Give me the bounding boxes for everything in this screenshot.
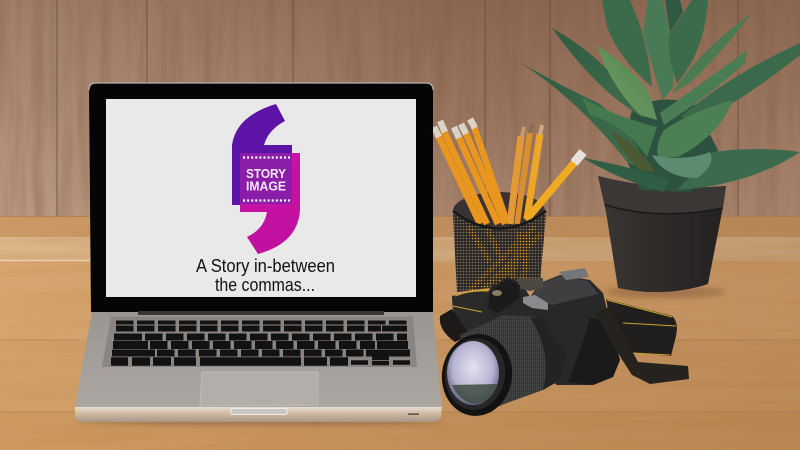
pencil holder: mesh body <box>453 211 546 292</box>
logo: film perforations <box>243 158 290 200</box>
laptop lid <box>89 83 433 312</box>
pencil: upright group <box>510 124 542 224</box>
leaf: behind center <box>610 130 655 172</box>
laptop latch <box>231 408 287 414</box>
camera lens glass <box>447 341 499 405</box>
laptop shadow <box>76 417 444 425</box>
camera prism highlight <box>530 276 598 305</box>
hinge <box>138 311 384 315</box>
leaf: far left <box>503 52 650 170</box>
leaf: plant core <box>622 100 718 192</box>
leaf: upper left <box>552 28 645 118</box>
leaf: spike upper right <box>672 13 752 93</box>
leaf: tall top right <box>669 0 708 83</box>
leaf: tall top left <box>602 0 652 87</box>
pencil erasers <box>434 119 475 138</box>
logo: wordmark: STORY <box>246 166 286 181</box>
leaf: tall top middle <box>643 0 673 100</box>
laptop base lip <box>75 406 442 422</box>
leaf: center curl <box>652 152 711 178</box>
trackpad <box>200 372 318 406</box>
logo: wordmark: IMAGE <box>246 178 286 194</box>
leaf: bottom left <box>583 158 670 192</box>
logo: magenta lower comma <box>240 153 300 254</box>
camera top dial plate <box>488 279 520 313</box>
pencil: yellow slanted <box>526 163 574 220</box>
laptop screen <box>106 99 416 297</box>
plant pot <box>598 176 726 298</box>
strap: wrist loop <box>595 307 689 384</box>
camera strap <box>440 291 677 356</box>
camera hot shoe <box>559 268 589 280</box>
camera <box>437 268 689 420</box>
leaf: center left <box>582 97 657 157</box>
wood wall background <box>0 0 800 220</box>
keyboard keys <box>111 322 410 363</box>
strap: right loop <box>606 299 677 356</box>
logo: wordmark <box>246 166 286 194</box>
keyboard well <box>102 316 417 367</box>
pencil: left group <box>438 124 507 224</box>
leaf: front right <box>657 100 733 157</box>
leaf: top rear <box>665 0 683 32</box>
tagline: A Story in-between <box>196 256 335 276</box>
camera mode dial <box>518 278 543 291</box>
wooden table <box>0 216 800 450</box>
leaf: mid right <box>660 50 747 125</box>
logo: centre panel <box>240 153 292 204</box>
tagline: the commas... <box>215 275 315 295</box>
camera lens barrel <box>460 315 567 415</box>
tagline <box>196 256 335 295</box>
story image logo <box>232 104 300 254</box>
leaf: bottom right <box>677 149 800 190</box>
camera grip <box>568 318 620 385</box>
camera left plate <box>482 275 620 385</box>
camera lens front ring <box>437 330 517 420</box>
leaf: curled front left <box>597 45 657 120</box>
laptop deck <box>75 312 442 407</box>
leaf: large right <box>680 43 800 122</box>
pencils <box>434 119 583 224</box>
logo: purple upper comma <box>232 104 292 205</box>
aloe plant <box>503 0 800 192</box>
camera pop-up flash <box>523 295 548 310</box>
laptop <box>75 83 444 425</box>
status light <box>408 414 419 415</box>
pencil holder: rear rim <box>453 192 545 230</box>
strap: left loop <box>452 291 495 335</box>
